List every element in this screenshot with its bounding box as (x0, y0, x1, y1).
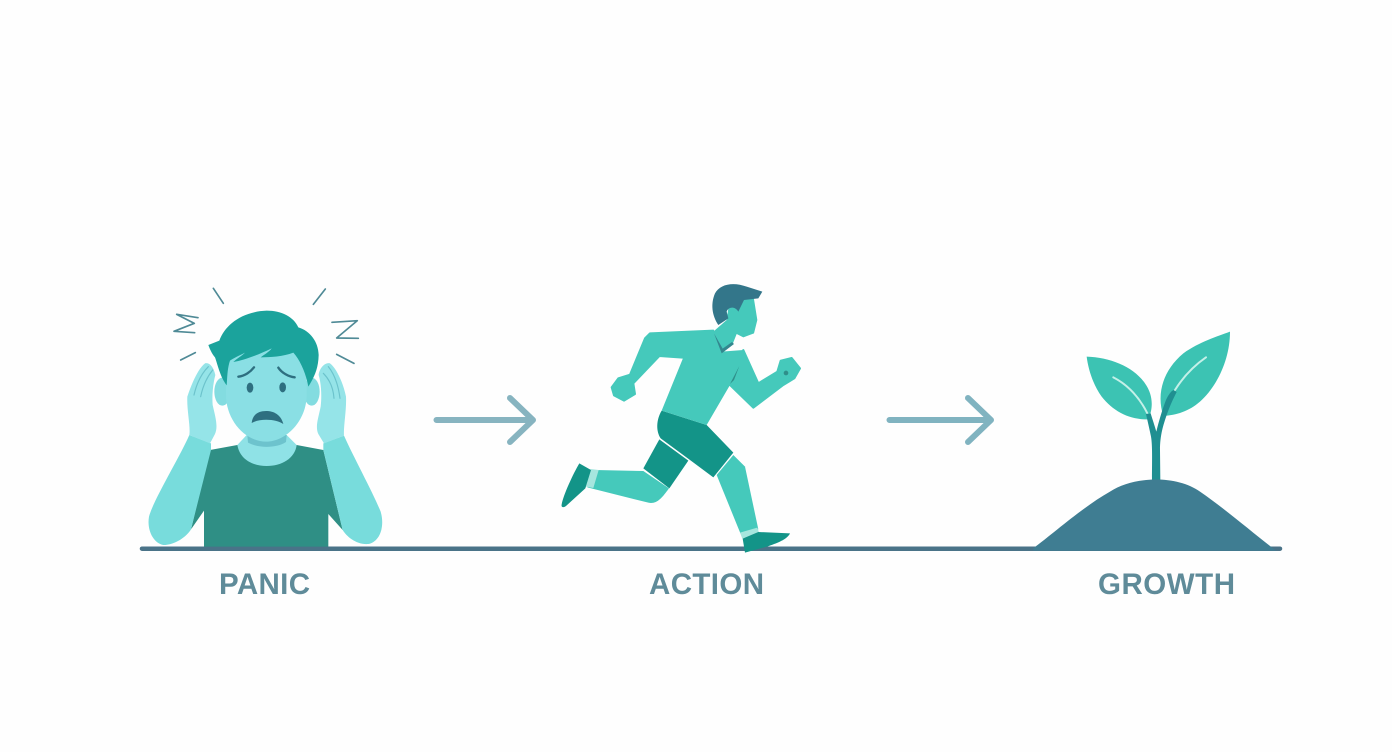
stem (1146, 390, 1177, 480)
finger lines (194, 367, 340, 398)
arrow: panic to action (436, 398, 533, 442)
right hand (317, 363, 346, 443)
face and neck (713, 295, 757, 351)
back thigh shorts (643, 439, 688, 488)
neck and collar (237, 435, 297, 466)
face (226, 337, 307, 442)
front arm (730, 350, 800, 408)
mouth (252, 411, 283, 424)
back shoe (562, 463, 591, 507)
running figure (562, 284, 800, 553)
back leg (587, 470, 669, 503)
arrow: action to growth (890, 398, 991, 442)
right arm (323, 436, 382, 544)
mound (1033, 480, 1276, 551)
watch dot (784, 371, 788, 375)
right leaf (1161, 332, 1230, 416)
leaf veins (1113, 357, 1206, 413)
left hand (187, 363, 216, 443)
back sock (586, 469, 599, 488)
panic figure (149, 288, 382, 547)
torso (662, 331, 743, 425)
eyes (247, 383, 253, 393)
arm crease (730, 366, 739, 384)
eyebrows (238, 367, 295, 377)
left leaf (1087, 357, 1152, 419)
label: action: ACTION (649, 568, 764, 601)
left arm (149, 435, 211, 545)
sprout on mound (1033, 332, 1276, 551)
hair (208, 311, 319, 387)
front sock (740, 528, 759, 539)
neck shadow (247, 435, 287, 447)
collar (714, 333, 734, 353)
shorts (657, 411, 733, 477)
stress marks (174, 288, 358, 363)
back arm (612, 331, 713, 401)
ground line (142, 546, 1280, 551)
label: growth: GROWTH (1098, 568, 1235, 601)
ears (214, 378, 230, 406)
shirt (191, 445, 343, 547)
label: panic: PANIC (219, 568, 310, 601)
hair (712, 284, 762, 325)
front shoe (743, 532, 790, 553)
front leg (717, 455, 758, 534)
